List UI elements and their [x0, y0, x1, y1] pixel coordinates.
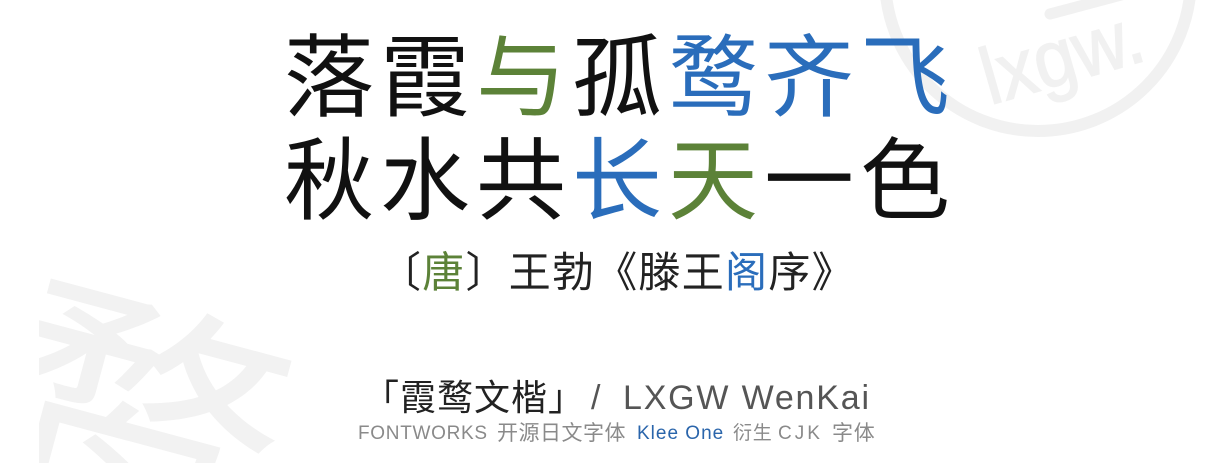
font description	[358, 422, 875, 445]
font description: 衍生	[733, 423, 772, 444]
font name: LXGW WenKai	[623, 379, 871, 417]
font description: 字体	[832, 422, 875, 445]
font description: FONTWORKS	[358, 423, 488, 444]
font description: Klee One	[637, 423, 724, 444]
font name: 「霞鹜文楷」	[363, 377, 585, 418]
font name: /	[591, 379, 600, 417]
title line 2: 秋水共长天一色	[284, 132, 956, 232]
watermark: lxgw circular logo	[880, 0, 1196, 137]
font description: 开源日文字体	[497, 422, 626, 445]
title line 1: 落霞与孤鹜齐飞	[284, 29, 956, 129]
attribution: 〔唐〕王勃《滕王阁序》	[379, 249, 855, 296]
font name	[363, 377, 871, 418]
font description: CJK	[778, 423, 823, 444]
